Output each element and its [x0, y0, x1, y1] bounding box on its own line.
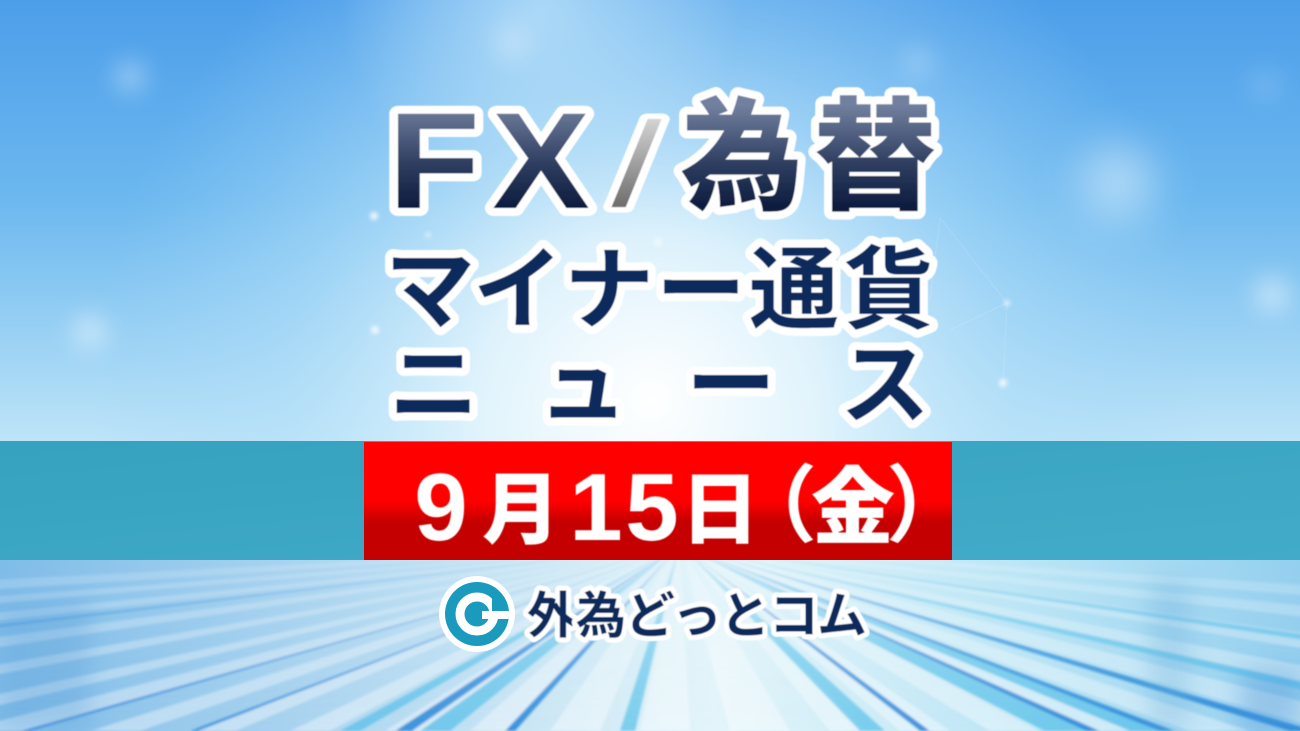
heading: マイナー通貨: マ: [385, 217, 475, 347]
heading: ニュース: ス: [840, 312, 930, 442]
teal band: [0, 441, 1300, 560]
title: FX/為替: [388, 59, 936, 238]
title: FX/為替: F: [388, 84, 480, 237]
date banner: [364, 439, 970, 562]
date text: 金: [811, 441, 895, 562]
title: FX/為替: /: [611, 99, 662, 232]
icon: logo mark: [439, 576, 515, 652]
logo text: ど: [625, 576, 675, 648]
heading: マイナー通貨: イ: [473, 217, 563, 347]
heading: マイナー通貨: ー: [656, 217, 746, 347]
date text: 月: [482, 448, 560, 560]
logo text: ム: [817, 576, 867, 648]
heading: ニュース: ニ: [389, 312, 479, 442]
date text: ）: [886, 439, 970, 560]
heading: マイナー通貨: 通: [749, 217, 839, 347]
heading: ニュース: ー: [686, 312, 776, 442]
background: blue sky glow: [0, 0, 1300, 445]
logo text: [527, 576, 867, 648]
title: FX/為替: X: [492, 85, 590, 238]
date text: 1: [569, 454, 623, 561]
logo text: コ: [769, 576, 819, 648]
logo: 外為どっとコム: [439, 576, 867, 652]
red banner background: [364, 442, 952, 560]
date text: [414, 439, 970, 562]
date text: 日: [681, 448, 759, 560]
title: FX/為替: 替: [814, 59, 936, 236]
heading: マイナー通貨: 貨: [844, 217, 934, 347]
logo text: 為: [576, 576, 626, 648]
logo text: っ: [672, 576, 722, 648]
logo text: 外: [527, 576, 577, 648]
heading: マイナー通貨: ナ: [564, 217, 654, 347]
heading: マイナー通貨: [385, 217, 934, 347]
heading: ニュース: [389, 312, 930, 442]
background: radiating speed lines floor: [0, 545, 1300, 731]
date text: 9: [414, 454, 468, 561]
logo text: と: [720, 576, 770, 648]
heading: ニュース: ュ: [538, 312, 628, 442]
title: FX/為替: 為: [681, 59, 803, 236]
date text: （: [733, 439, 817, 560]
date text: 5: [625, 454, 679, 561]
